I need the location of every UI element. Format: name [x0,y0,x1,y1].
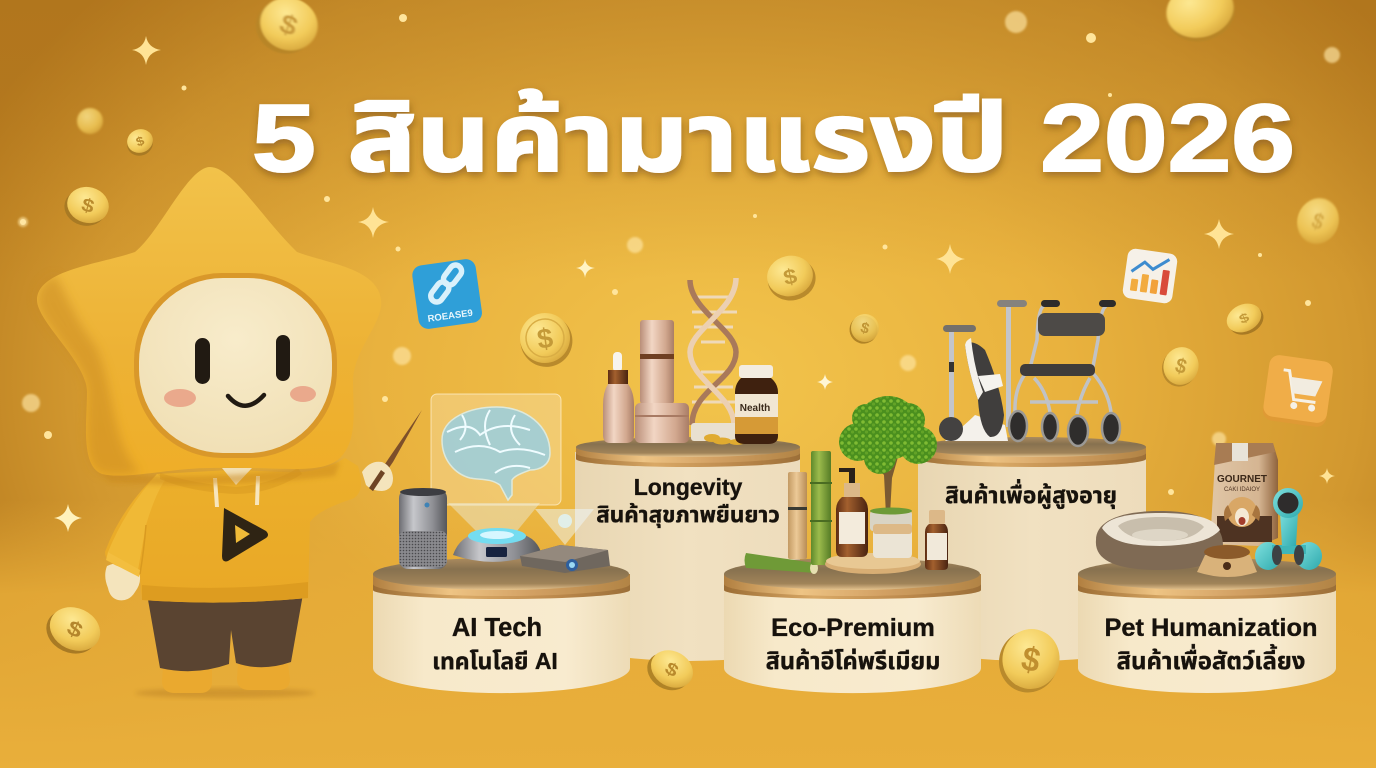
DNA helix [690,278,737,425]
smile [228,395,264,406]
hood strings [213,476,260,507]
label [766,614,940,675]
label [596,474,780,528]
products: AI hologram and gadgets [399,394,610,573]
tall bottle [640,320,674,404]
podium: AI Tech [373,558,630,693]
hoodie torso and sleeves [105,458,361,603]
coin [846,311,882,347]
lying bamboo [744,553,815,573]
walker base [945,415,1008,441]
podium: Longevity [575,437,800,661]
coin [1291,192,1345,250]
coin [39,598,107,662]
coin [1158,343,1203,391]
leg brace [965,342,1004,437]
icon: shopping cart tile [1262,354,1334,428]
pointer stick [369,410,422,491]
planter [870,511,912,531]
coin: $ [134,133,147,149]
coin [763,251,820,305]
products: eco premium [744,396,948,574]
coin [1160,0,1241,49]
tree [870,450,900,515]
supplement bottle [739,365,773,378]
label: สินค้าเพื่อสัตว์เลี้ยง [1116,644,1306,675]
eyes [195,338,210,384]
coin [1222,298,1268,341]
cheeks [164,389,196,407]
icon: blue link badge [411,258,483,330]
hologram panel [431,394,561,505]
coin: $ [859,319,872,338]
backrest [1038,313,1105,336]
neck and hood collar [222,468,252,485]
play logo [222,508,268,561]
icon: growth chart tile [1122,248,1178,304]
coin: $ [64,616,86,643]
icon: blue link badge: ROEASE9 [427,308,474,325]
pedestal [691,423,741,441]
seat [1020,364,1095,376]
sparkles and glowing dots [18,11,1340,532]
podium: Eco-Premium [724,558,981,693]
brain [442,407,550,500]
pump bottle [849,468,855,488]
coin: $ [276,8,302,42]
handles [1041,300,1060,307]
title: 5 สินค้ามาแรงปี 2026 [252,85,1295,192]
star head [37,167,381,476]
rollator frame [1015,306,1111,414]
label [432,614,558,674]
coin [640,642,700,699]
cone hologram [535,509,594,545]
label: สินค้าอีโค่พรีเมียม [766,649,940,675]
coin: $ [1308,209,1327,235]
coin [123,126,157,159]
pants [147,594,303,671]
wheels [1009,411,1120,446]
jar [873,524,912,558]
products: elderly mobility aids [939,300,1120,446]
floating coins (foreground) [640,623,1065,699]
teal toy [1255,542,1281,570]
coin: $ [535,322,555,355]
coins stack [704,434,745,445]
label [1104,614,1318,675]
podium: elderly products [918,437,1146,661]
coin [517,309,576,370]
dog [1227,497,1257,527]
wooden plate [825,554,921,574]
light beam [448,503,540,537]
coin: $ [661,658,682,681]
second pole [1006,305,1011,427]
coin: $ [1173,354,1189,379]
pet bed [1096,511,1223,570]
products: pet care: GOURNET [1217,474,1267,485]
label: Longevity [634,474,743,500]
cane [949,330,954,422]
small bottle [929,510,945,524]
face [134,273,337,458]
base device [453,533,541,562]
coin [248,0,325,63]
label: AI Tech [452,614,542,642]
head shadow [100,462,340,485]
label: สินค้าเพื่อผู้สูงอายุ [945,479,1117,509]
coin [77,108,103,134]
coin: $ [781,264,800,290]
wood tube [788,472,807,559]
coin [60,182,113,231]
coin: $ [79,195,97,218]
speaker [399,489,447,569]
label: Eco-Premium [771,614,935,642]
label: เทคโนโลยี AI [432,648,558,674]
coin [993,623,1065,698]
mascot: star character in hoodie [37,167,422,698]
projector [520,545,610,573]
products: longevity cosmetics and DNA [603,278,778,445]
right hand [362,462,393,491]
products: pet care: CAKI IDAIOY [1224,487,1260,493]
shoes [162,664,290,693]
food bowl [1197,555,1257,577]
products: longevity cosmetics and DNA: Nealth [740,403,770,414]
coin: $ [1018,640,1043,681]
products: pet care [1096,443,1322,577]
left hand [105,563,140,600]
podium: Pet Humanization [1078,558,1336,693]
ground shadow [135,688,315,698]
bamboo [811,451,831,565]
label: สินค้าสุขภาพยืนยาว [596,502,780,528]
food bag [1210,443,1278,546]
coin: $ [1237,310,1252,327]
cream jar [635,403,689,443]
label: Pet Humanization [1104,614,1318,642]
serum [613,352,622,372]
